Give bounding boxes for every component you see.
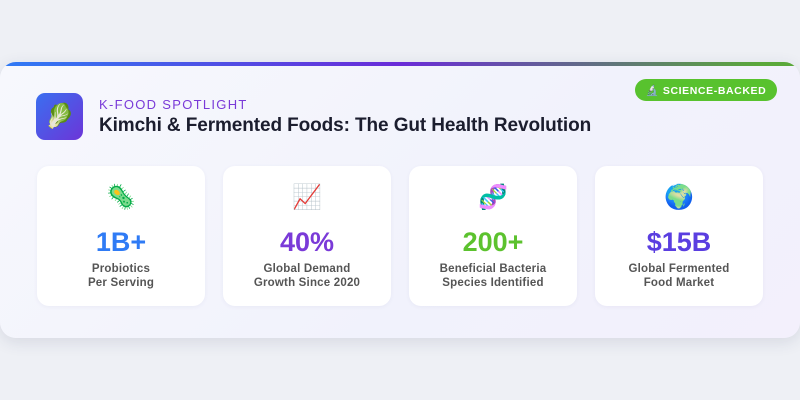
value: 40% <box>280 227 334 257</box>
label <box>629 263 729 289</box>
value: 200+ <box>463 227 523 257</box>
value: 1B+ <box>96 227 146 257</box>
icon: microbe: 🦠 <box>106 184 136 211</box>
label: Probiotics <box>92 263 150 275</box>
label: Per Serving <box>88 277 154 289</box>
label: Global Fermented <box>629 263 729 275</box>
title: Kimchi & Fermented Foods: The Gut Health Revolution <box>99 115 591 136</box>
label: Beneficial Bacteria <box>440 263 546 275</box>
stat: demand growth <box>223 166 391 306</box>
label: Food Market <box>644 277 714 289</box>
badge: 🔬 SCIENCE-BACKED <box>646 84 766 96</box>
main card <box>0 62 800 338</box>
icon: globe: 🌍 <box>664 184 694 211</box>
label: Species Identified <box>442 277 544 289</box>
label <box>254 263 360 289</box>
label: Global Demand <box>264 263 350 275</box>
value: $15B <box>647 227 711 257</box>
icon: logo leaf <box>36 93 83 140</box>
label <box>440 263 546 289</box>
stat: probiotics <box>37 166 205 306</box>
badge <box>635 79 777 101</box>
icon: dna: 🧬 <box>478 184 508 211</box>
kicker: K-FOOD SPOTLIGHT <box>99 97 248 112</box>
label: Growth Since 2020 <box>254 277 360 289</box>
icon: logo leaf: 🥬 <box>45 103 74 130</box>
stat: bacteria species <box>409 166 577 306</box>
stat: market <box>595 166 763 306</box>
icon: chart: 📈 <box>292 184 322 211</box>
label <box>88 263 154 289</box>
